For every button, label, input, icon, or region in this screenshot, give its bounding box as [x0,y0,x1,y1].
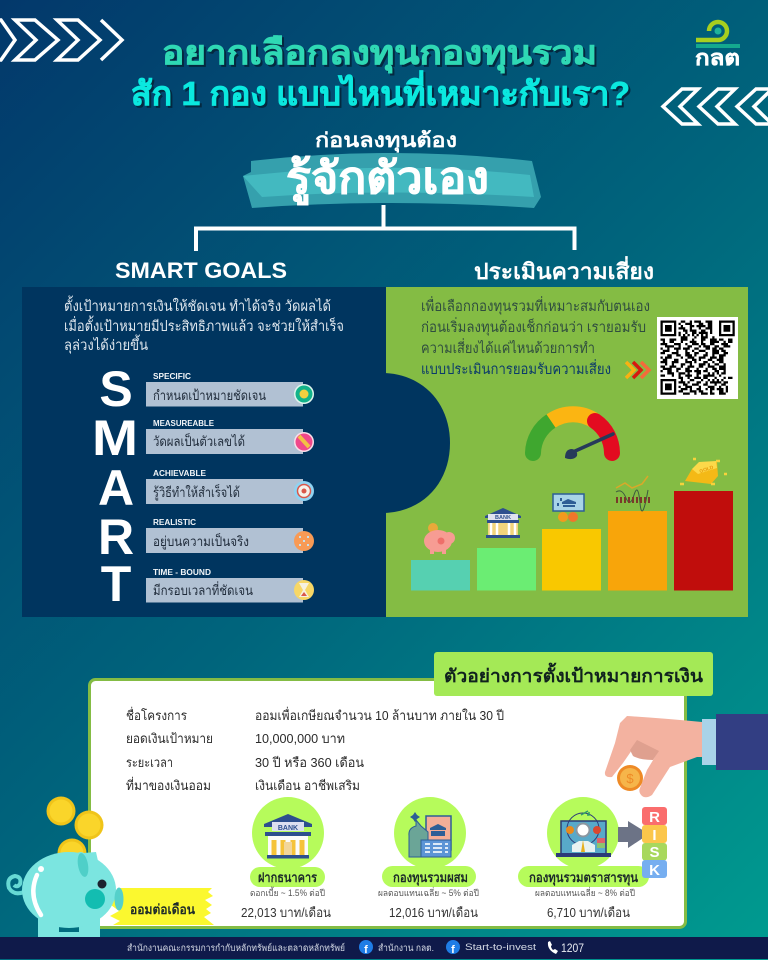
option: mixed fund: กองทุนรวมผสม [393,870,468,886]
panel text: risk intro: ก่อนเริ่มลงทุนต้องเช็กก่อนว่า เรายอมรับ [421,317,646,336]
project details [126,707,504,793]
row: time-bound: มีกรอบเวลาที่ชัดเจน [153,581,253,598]
row: specific [146,372,314,406]
monthly savings brush label: ออมต่อเดือน [130,902,196,917]
icon: facebook second: f [451,944,455,956]
heading: risk assessment: ประเมินความเสี่ยง [474,255,654,284]
footer text: hotline: 1207 [561,943,584,955]
option: equity fund: กองทุนรวมตราสารทุน [529,870,638,886]
panel text: risk intro [421,296,650,378]
risk blocks: I [652,827,657,844]
title: อยากเลือกลงทุนกองทุนรวม [162,34,597,74]
icon: stock chart [616,476,650,511]
risk blocks [642,807,667,879]
option: mixed fund: ผลตอบแทนเฉลี่ย ~ 5% ต่อปี [378,886,479,898]
gauge [533,414,613,459]
card tag: savings goal example [434,652,713,696]
decorative chevrons: top left [0,20,122,60]
risk blocks: K [649,862,660,879]
project details: 10,000,000 บาท [255,731,345,746]
row: measureable [146,419,314,454]
SMART letters: R [98,509,134,565]
row: specific: SPECIFIC [153,372,191,381]
project details: ชื่อโครงการ [126,707,187,723]
SMART letters [92,361,138,612]
panel text: risk intro: แบบประเมินการยอมรับความเสี่ยง [421,359,611,378]
icon: bank small [485,508,521,538]
panel: savings example card [90,680,686,928]
heading brush: know yourself [243,153,541,208]
row: achievable: รู้วิธีทำให้สำเร็จได้ [153,483,240,501]
row: achievable: ACHIEVABLE [153,469,207,478]
QR code [657,317,738,399]
footer bar [0,937,768,959]
risk blocks: S [649,844,660,861]
option: mixed fund: 12,016 บาท/เดือน [389,905,478,920]
panel text: smart intro: เมื่อตั้งเป้าหมายมีประสิทธิภาพแล้ว จะช่วยให้สำเร็จ [64,315,344,335]
icon: facebook: f [364,944,368,956]
row: realistic: REALISTIC [153,518,196,527]
SMART letters: T [101,556,131,612]
SMART letters: M [92,410,138,466]
row: realistic: อยู่บนความเป็นจริง [153,532,249,550]
hand holding coin [605,714,768,797]
row: time-bound [146,568,314,602]
heading: SMART GOALS: SMART GOALS [115,258,287,283]
project details: ออมเพื่อเกษียณจำนวน 10 ล้านบาท ภายใน 30 ปี [255,707,504,723]
footer text: agency: สำนักงานคณะกรรมการกำกับหลักทรัพย์และตลาดหลักทรัพย์ [127,942,345,954]
title [131,34,630,112]
bar chart: risk levels [411,491,733,590]
hand holding coin: $ [626,771,634,786]
panel: smart goals [22,287,386,617]
row: measureable: วัดผลเป็นตัวเลขได้ [153,432,245,449]
row: realistic [146,518,314,553]
panel text: smart intro [64,295,344,354]
row: specific: กำหนดเป้าหมายชัดเจน [153,388,266,403]
panel text: smart intro: ตั้งเป้าหมายการเงินให้ชัดเจน ทำได้จริง วัดผลได้ [64,295,331,315]
arrow to risk [618,821,649,848]
panel text: risk intro: ความเสี่ยงได้แค่ไหนด้วยการทำ [421,338,595,357]
row: time-bound: TIME - BOUND [153,568,211,577]
monthly savings brush label [110,888,214,925]
icon: triple arrows [626,362,649,378]
decorative chevrons: top right [663,89,768,124]
row: measureable: MEASUREABLE [153,419,215,428]
panel: risk assessment [385,287,748,617]
option: bank deposit [241,797,331,920]
panel text: risk intro: เพื่อเลือกกองทุนรวมที่เหมาะสมกับตนเอง [421,296,650,315]
icon: piggy bank small [424,523,455,554]
icon: phone [548,941,558,954]
option: bank deposit: ฝากธนาคาร [258,870,317,885]
option: equity fund: 6,710 บาท/เดือน [547,905,630,920]
row: achievable [146,469,314,504]
card tag: savings goal example: ตัวอย่างการตั้งเป้าหมายการเงิน [444,662,704,686]
footer text: sec page: สำนักงาน กลต. [378,943,434,954]
icon: gold bar [680,459,727,484]
logo: SEC Thailand: กลต [695,47,740,70]
project details: 30 ปี หรือ 360 เดือน [255,755,364,770]
risk blocks: R [649,809,660,826]
icon: piggy bank large [8,852,124,937]
option: equity fund: ผลตอบแทนเฉลี่ย ~ 8% ต่อปี [535,886,635,898]
subtitle: ก่อนลงทุนต้อง [315,129,457,153]
heading brush: know yourself: รู้จักตัวเอง [286,154,489,205]
icon: facebook second [446,940,460,956]
option: bank deposit: 22,013 บาท/เดือน [241,905,331,920]
option: bank deposit: BANK [278,825,298,832]
SMART letters: S [99,361,133,417]
project details: ระยะเวลา [126,755,173,770]
logo: SEC Thailand [695,22,740,70]
project details: ที่มาของเงินออม [126,777,211,793]
icon: bank small: BANK [495,515,511,521]
icon: bond certificate [553,494,584,522]
footer text: start to invest: Start-to-invest [465,942,536,953]
semicircle joining panels [385,373,450,513]
project details: ยอดเงินเป้าหมาย [126,731,213,746]
option: equity fund [518,797,649,920]
SMART letters: A [98,460,134,516]
option: mixed fund [378,797,479,920]
project details: เงินเดือน อาชีพเสริม [255,778,360,793]
option: bank deposit: ดอกเบี้ย ~ 1.5% ต่อปี [250,886,325,898]
icon: gold bar: GOLD [699,465,715,475]
connector lines [196,205,574,251]
panel text: smart intro: ลุล่วงได้ง่ายขึ้น [64,334,148,354]
title: สัก 1 กอง แบบไหนที่เหมาะกับเรา? [131,70,630,112]
coins above piggy [46,796,104,868]
icon: facebook [359,940,373,956]
